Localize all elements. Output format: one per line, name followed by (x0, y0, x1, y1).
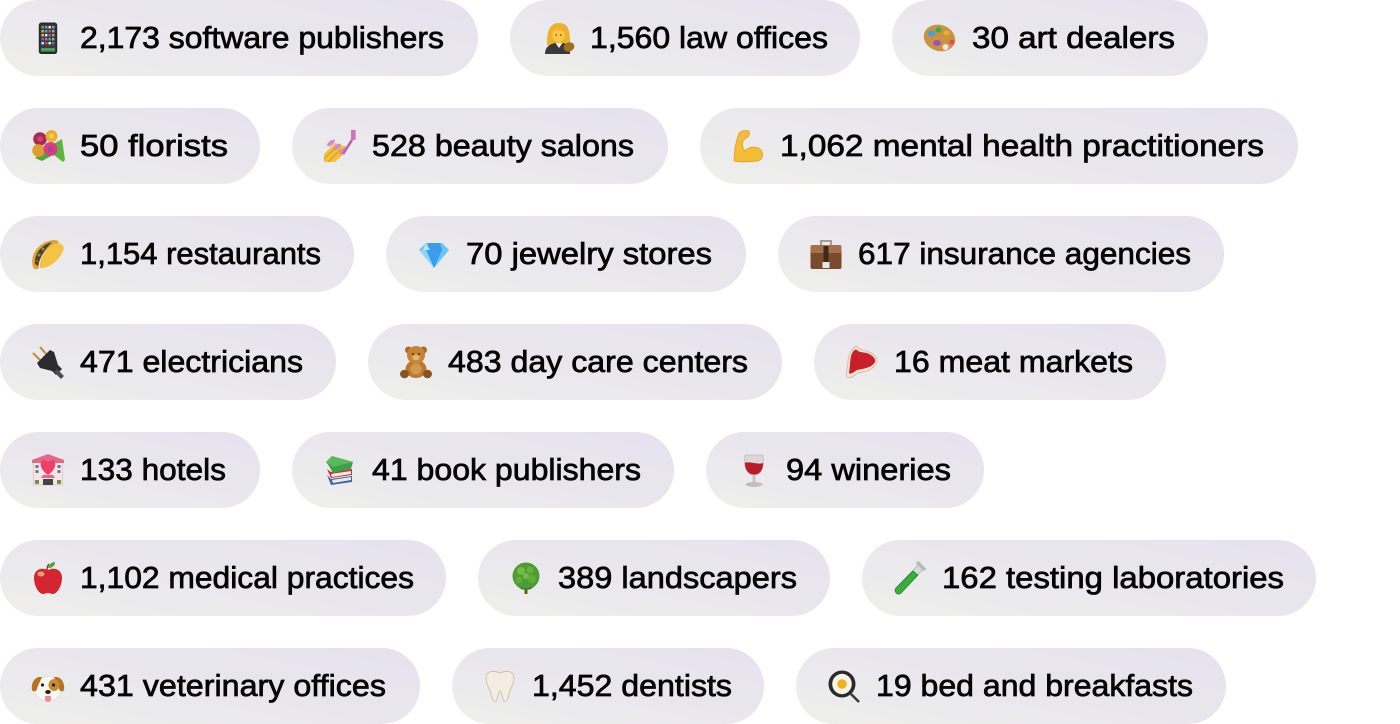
label: 2,173 software publishers (80, 20, 444, 55)
label: 30 art dealers (972, 20, 1175, 55)
icon: woman judge (545, 23, 576, 54)
label: 19 bed and breakfasts (876, 668, 1193, 703)
pill: 1,452 dentists (452, 648, 764, 724)
pill: 133 hotels (0, 432, 260, 508)
pill: 94 wineries (706, 432, 984, 508)
pill: 431 veterinary offices (0, 648, 420, 724)
pill: 70 jewelry stores (386, 216, 746, 292)
pill: 1,102 medical practices (0, 540, 446, 616)
label: 1,452 dentists (532, 668, 732, 703)
icon: electric plug (33, 347, 64, 379)
label: 431 veterinary offices (80, 668, 386, 703)
pill: 41 book publishers (292, 432, 674, 508)
pill: 2,173 software publishers (0, 0, 478, 76)
pill: 528 beauty salons (292, 108, 668, 184)
pill: 483 day care centers (368, 324, 782, 400)
label: 471 electricians (80, 344, 303, 379)
label: 483 day care centers (448, 344, 748, 379)
label: 162 testing laboratories (942, 560, 1284, 595)
label: 1,102 medical practices (80, 560, 414, 595)
icon: love hotel (32, 454, 64, 485)
icon: deciduous tree (512, 562, 540, 594)
icon: wine glass (745, 455, 763, 487)
icon: gem stone (419, 243, 449, 268)
label: 133 hotels (80, 452, 226, 487)
icon: red apple (34, 562, 62, 594)
pill: 162 testing laboratories (862, 540, 1316, 616)
label: 16 meat markets (894, 344, 1133, 379)
icon: test tube (895, 562, 925, 594)
pill: 1,154 restaurants (0, 216, 354, 292)
icon: briefcase (810, 241, 842, 269)
label: 1,154 restaurants (80, 236, 321, 271)
icon: frying pan with egg (828, 670, 859, 702)
pill: 389 landscapers (478, 540, 830, 616)
icon: teddy bear (400, 346, 432, 378)
label: 41 book publishers (372, 452, 641, 487)
label: 94 wineries (786, 452, 951, 487)
icon: dog face (32, 676, 64, 702)
icon: artist palette (920, 21, 959, 55)
pill: 1,560 law offices (510, 0, 860, 76)
icon: tooth (486, 671, 514, 701)
icon: stack of books (326, 456, 353, 485)
icon: cut of meat (846, 346, 877, 378)
label: 389 landscapers (558, 560, 797, 595)
pill: 30 art dealers (892, 0, 1208, 76)
pill: 50 florists (0, 108, 260, 184)
label: 50 florists (80, 128, 228, 163)
label: 1,560 law offices (590, 20, 828, 55)
icon: bouquet (32, 130, 65, 162)
icon: mobile phone (39, 22, 57, 54)
pill: 471 electricians (0, 324, 336, 400)
icon: taco (32, 240, 64, 269)
pill: 1,062 mental health practitioners (700, 108, 1298, 184)
label: 1,062 mental health practitioners (780, 128, 1264, 163)
icon: flexed biceps (734, 131, 763, 162)
icon: nail polish (324, 130, 356, 162)
label: 70 jewelry stores (466, 236, 712, 271)
pill: 19 bed and breakfasts (796, 648, 1226, 724)
pill: 617 insurance agencies (778, 216, 1224, 292)
label: 617 insurance agencies (858, 236, 1191, 271)
pill: 16 meat markets (814, 324, 1166, 400)
label: 528 beauty salons (372, 128, 634, 163)
